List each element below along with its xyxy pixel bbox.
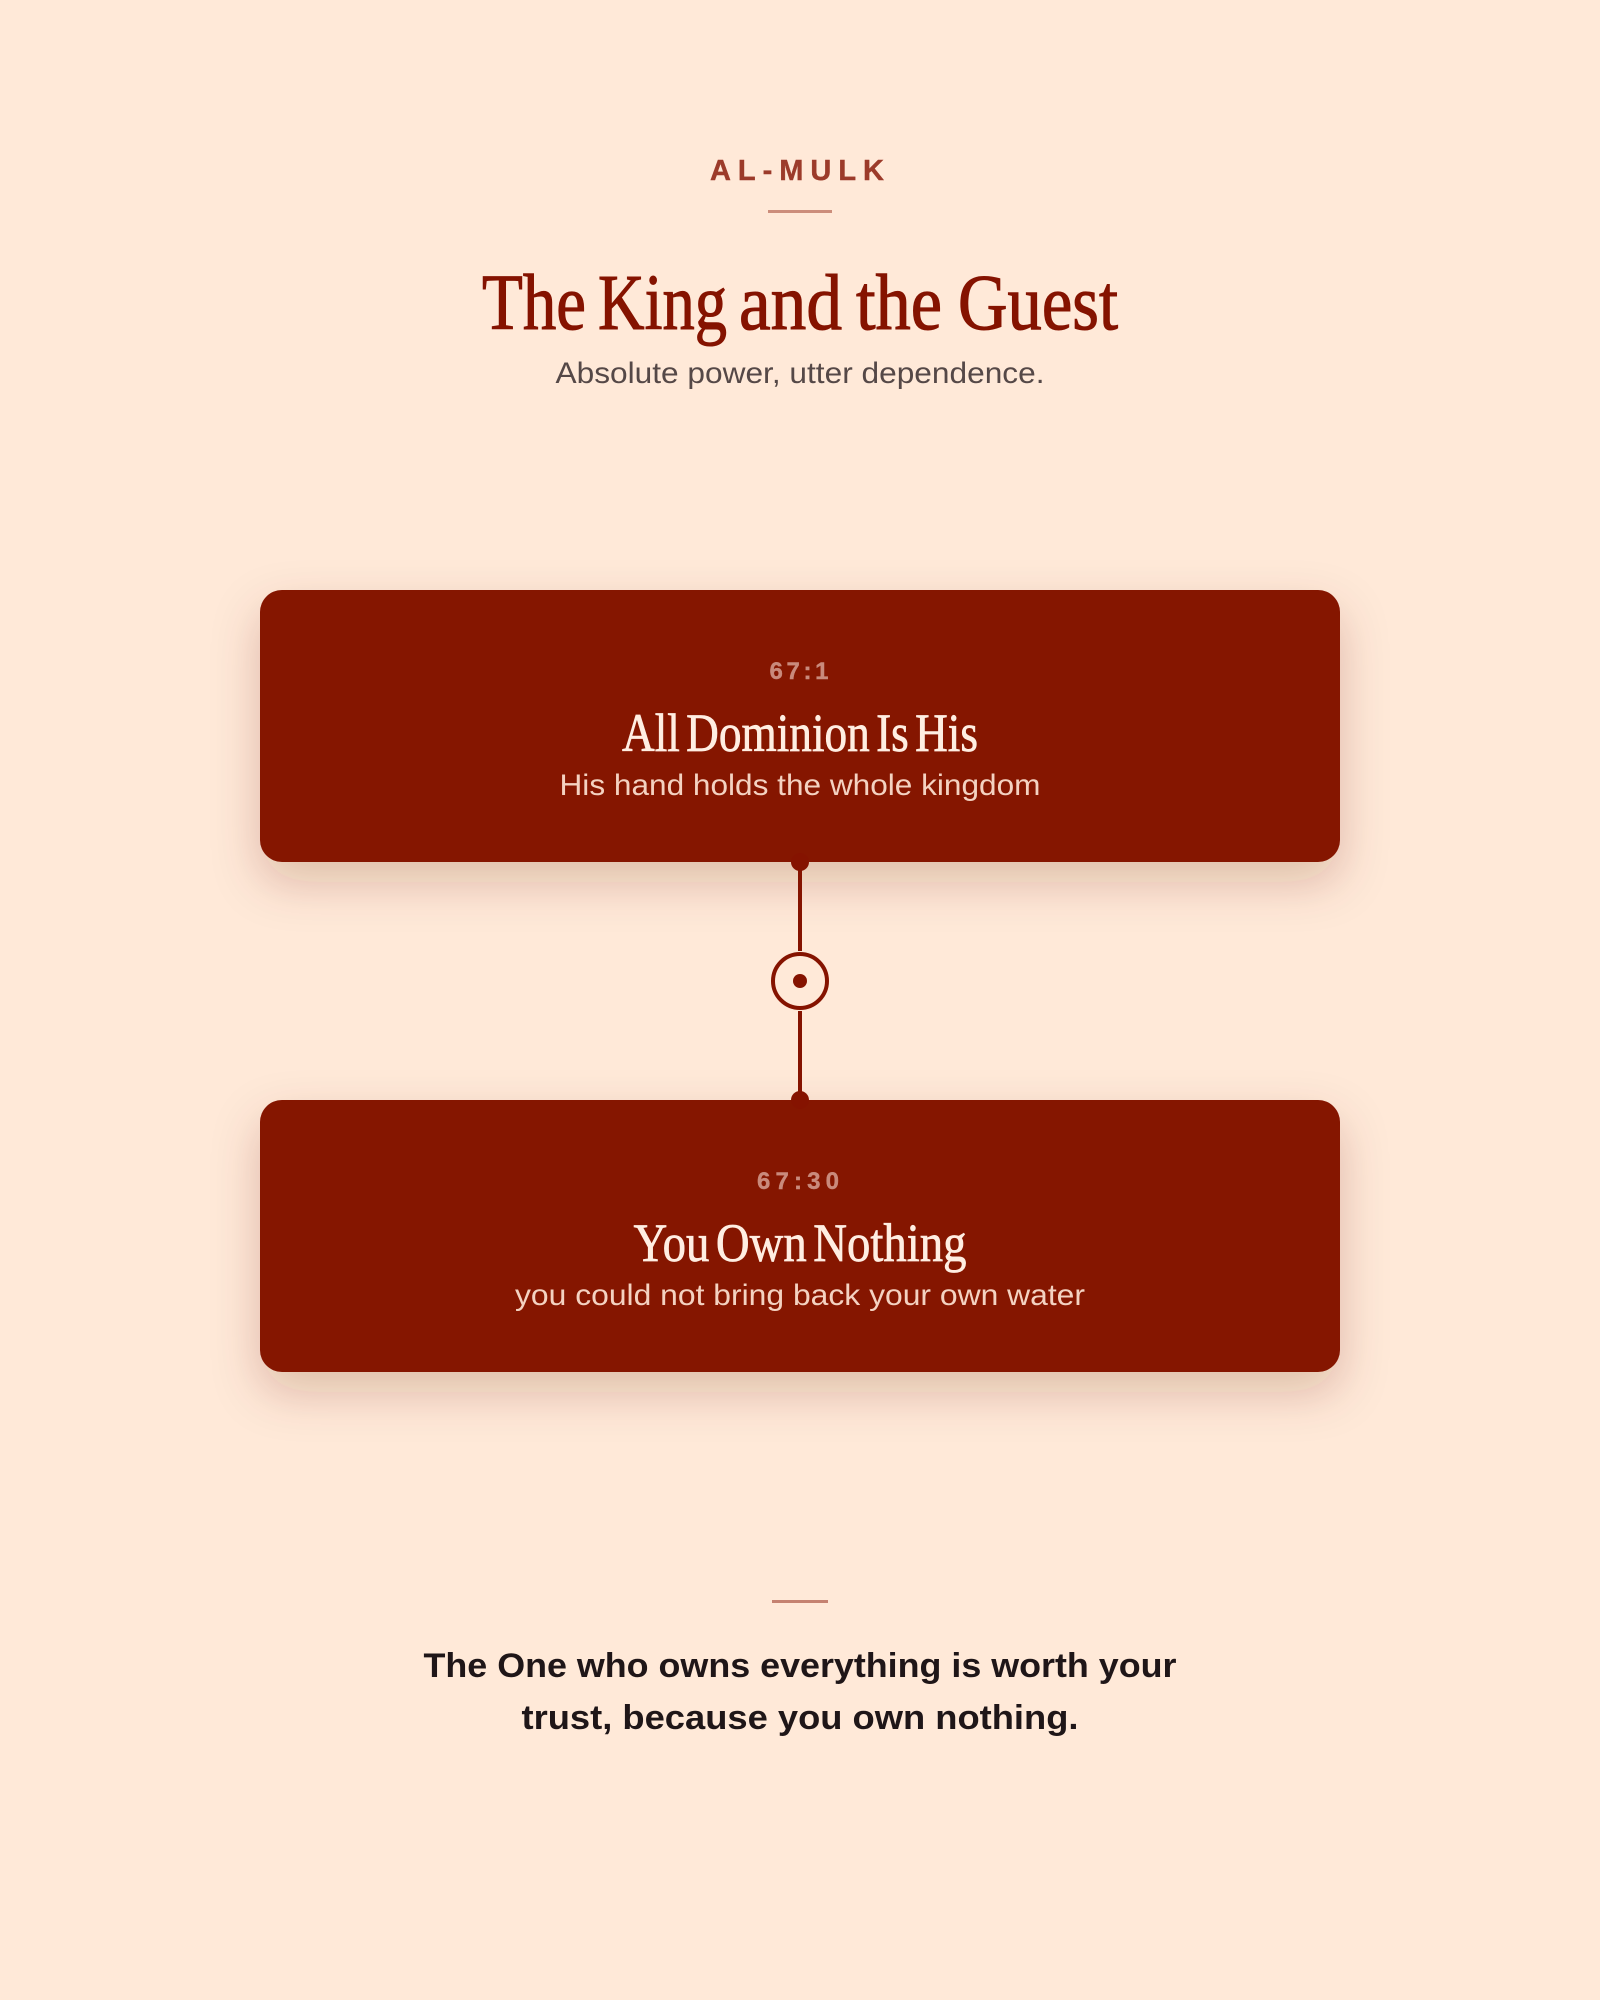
header — [482, 155, 1118, 390]
footer takeaway — [424, 1600, 1176, 1737]
verse reference 67:1: 67:1 — [770, 658, 828, 685]
title: the — [856, 260, 942, 347]
subtitle: Absolute power, utter dependence. — [556, 357, 1044, 390]
card heading: You Own Nothing — [634, 1213, 966, 1273]
eyebrow: AL-MULK: AL-MULK — [710, 155, 884, 187]
title: The — [482, 260, 586, 347]
title: King — [598, 260, 727, 347]
card description: you could not bring back your own water — [515, 1279, 1085, 1312]
footer rule — [772, 1600, 828, 1603]
closing statement: The One who owns everything is worth your — [424, 1647, 1176, 1685]
verse reference 67:30: 67:30 — [757, 1168, 839, 1195]
card heading: All Dominion Is His — [622, 703, 978, 763]
title: and — [739, 260, 842, 347]
closing statement: trust, because you own nothing. — [522, 1699, 1078, 1737]
panel: card 67:30 — [260, 1100, 1340, 1372]
card description: His hand holds the whole kingdom — [560, 769, 1040, 802]
icon: ring with centre dot — [773, 954, 827, 1008]
panel: card 67:1 — [260, 590, 1340, 862]
title: Guest — [958, 260, 1118, 347]
header rule — [768, 210, 832, 213]
connector between cards — [773, 853, 827, 1109]
